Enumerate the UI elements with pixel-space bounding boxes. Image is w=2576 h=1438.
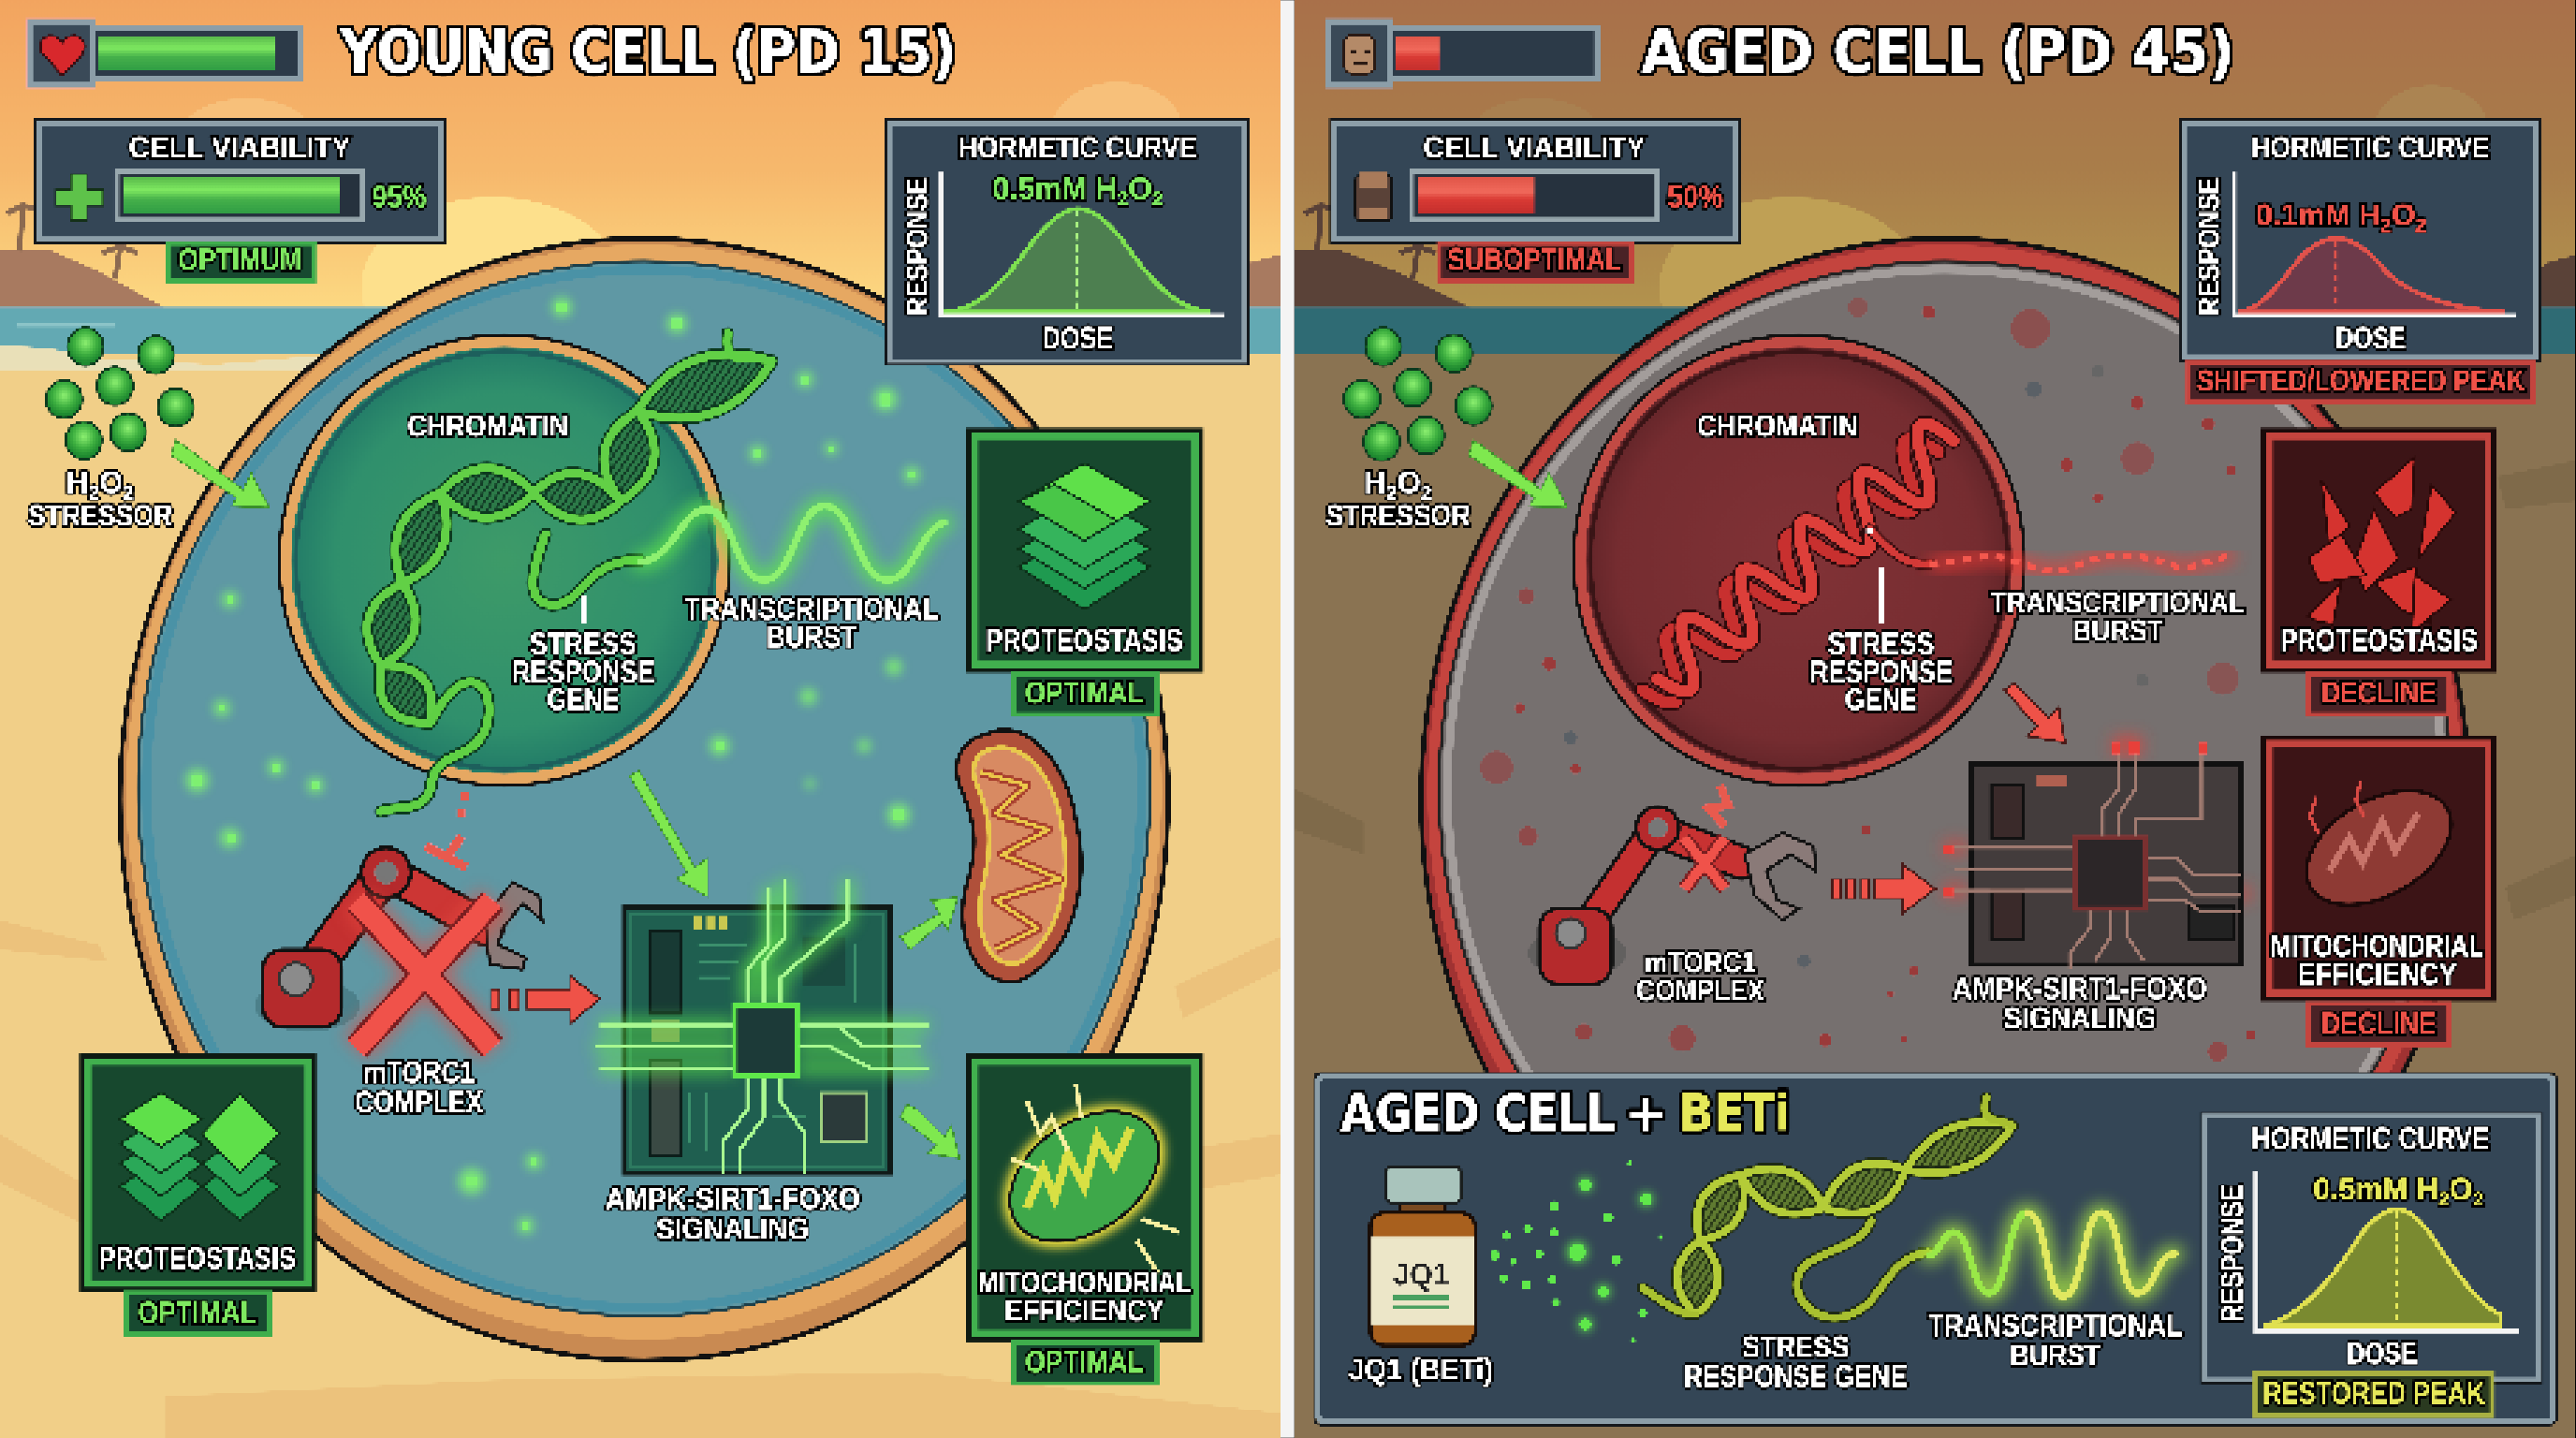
- nucleus: [279, 335, 729, 785]
- tag: optimal (mitochondria): OPTIMAL: [1025, 1344, 1144, 1378]
- chip: AMPK-SIRT1-FOXO signaling: [594, 879, 929, 1175]
- aged nucleus: [1573, 335, 2024, 785]
- tag: optimal (top right): OPTIMAL: [1025, 676, 1144, 710]
- label: stress response gene: [1809, 566, 1953, 716]
- dose label: 0.1mM H2O2: 0.1mM H: [2256, 198, 2380, 231]
- glowing sparkles: [185, 298, 920, 1234]
- label: mitochondrial efficiency: [977, 1266, 1191, 1328]
- arrow: stressor into aged cell: [1469, 440, 1567, 507]
- icon: H2O2 molecules: [1344, 328, 1492, 461]
- arrow: stressor into cell: [171, 440, 270, 507]
- value: 95 percent: 95%: [373, 180, 426, 213]
- label: H2O2 stressor: [1325, 466, 1471, 533]
- value: 50 percent: 50%: [1667, 180, 1723, 213]
- icon: broken protein shards: [2308, 457, 2456, 633]
- icon: damaged mitochondrion: [2287, 767, 2471, 929]
- arrow: signal to chip: [629, 770, 708, 897]
- card: proteostasis (top right): [970, 431, 1201, 670]
- label: AMPK-SIRT1-FOXO signaling: AMPK-SIRT1-FOXO: [606, 1182, 860, 1216]
- dose label: 0.5mM H2O2: O: [1128, 171, 1152, 205]
- axis label: response: RESPONSE: [2192, 178, 2226, 315]
- dusk beach background: [1295, 0, 2576, 1438]
- label: mitochondrial efficiency: MITOCHONDRIAL: [977, 1266, 1191, 1299]
- heading: hormetic curve: HORMETIC CURVE: [959, 130, 1197, 164]
- chart: lowered hormetic curve: [2234, 172, 2517, 315]
- label: H2O2 stressor: O: [1398, 466, 1421, 500]
- label: H2O2 stressor: H: [66, 466, 88, 500]
- chromatin DNA helix: [367, 333, 772, 812]
- card: mitochondrial efficiency: [970, 1056, 1201, 1339]
- label: transcriptional burst: TRANSCRIPTIONAL: [1928, 1309, 2183, 1343]
- dose label: 0.5mM H2O2: 0.5mM H: [2313, 1172, 2438, 1206]
- panel: hormetic curve: [2180, 120, 2539, 361]
- axis label: response: RESPONSE: [2216, 1184, 2249, 1323]
- tag: optimal (left): OPTIMAL: [138, 1296, 256, 1329]
- tag: shifted lowered peak: SHIFTED/LOWERED PEAK: [2197, 364, 2525, 398]
- icon: JQ1 bottle: [1370, 1167, 1475, 1345]
- label: stress response gene: [512, 594, 654, 716]
- label: H2O2 stressor: 2: [123, 483, 134, 505]
- dose label: 0.5mM H2O2: 2: [2473, 1189, 2484, 1211]
- label: signaling: AMPK-SIRT1-FOXO: [1953, 972, 2207, 1005]
- axis label: response: RESPONSE: [900, 178, 934, 315]
- label: H2O2 stressor: [28, 466, 172, 533]
- arrow: dashed red to chip: [1832, 864, 1936, 914]
- dose label: 0.5mM H2O2: O: [2450, 1172, 2473, 1206]
- label: stress response gene: RESPONSE: [1809, 654, 1953, 688]
- tag: decline (mitochondria): DECLINE: [2321, 1006, 2437, 1040]
- label: H2O2 stressor: 2: [1386, 483, 1398, 505]
- label: mTORC1 complex: [355, 1056, 483, 1119]
- label: proteostasis: PROTEOSTASIS: [2280, 624, 2478, 657]
- label: AMPK-SIRT1-FOXO signaling: [606, 1182, 860, 1245]
- label: mTORC1 complex: COMPLEX: [355, 1085, 483, 1119]
- arrow: chip to mitochondrial efficiency: [900, 1104, 959, 1158]
- divider between panels: [1280, 0, 1295, 1438]
- viability bar: [1412, 171, 1658, 220]
- title: young cell: YOUNG CELL (PD 15): [339, 17, 956, 86]
- label: H2O2 stressor: O: [99, 466, 123, 500]
- aged cell membrane and cytoplasm: [1421, 238, 2469, 1360]
- label: stress response gene: RESPONSE GENE: [1684, 1359, 1908, 1393]
- axis label: dose: DOSE: [2347, 1337, 2418, 1371]
- label: mTORC1 complex: [1636, 946, 1764, 1007]
- axis label: dose: DOSE: [2335, 321, 2406, 355]
- viability bar: [117, 171, 363, 220]
- mTORC1 robot arm overactive: [1528, 785, 1815, 984]
- label: chromatin: CHROMATIN: [1697, 409, 1858, 443]
- title: aged cell + BETi: [1340, 1083, 1791, 1142]
- label: mitochondrial efficiency: MITOCHONDRIAL: [2271, 929, 2484, 962]
- dose label: 0.1mM H2O2: 2: [2380, 214, 2392, 236]
- label: transcriptional burst: TRANSCRIPTIONAL: [684, 593, 939, 626]
- dose label: 0.5mM H2O2: 0.5mM H: [992, 171, 1118, 205]
- axis label: dose: DOSE: [1043, 321, 1113, 355]
- transcriptional burst wave: [640, 506, 944, 580]
- label: H2O2 stressor: STRESSOR: [28, 499, 172, 533]
- label: stress response gene: STRESS: [530, 627, 637, 661]
- label: stress response gene: GENE: [1845, 682, 1917, 716]
- icon: heart: [40, 36, 84, 76]
- tag: restored peak: RESTORED PEAK: [2263, 1376, 2485, 1410]
- label: H2O2 stressor: STRESSOR: [1325, 499, 1471, 533]
- title: aged cell + BETi: BETi: [1679, 1083, 1791, 1142]
- dose label: 0.5mM H2O2: 2: [1118, 188, 1128, 210]
- icon: aged face: [1355, 172, 1392, 220]
- label: proteostasis: PROTEOSTASIS: [98, 1241, 296, 1275]
- label: mitochondrial efficiency: EFFICIENCY: [2298, 957, 2457, 990]
- title: aged cell + BETi: AGED CELL: [1340, 1083, 1615, 1142]
- beach background: [0, 0, 1280, 1438]
- panel: restored hormetic curve: [2202, 1112, 2541, 1384]
- restored transcriptional burst: [1928, 1212, 2175, 1297]
- tag: suboptimal: SUBOPTIMAL: [1447, 242, 1621, 276]
- heading: hormetic curve: HORMETIC CURVE: [2251, 130, 2490, 164]
- label: transcriptional burst: BURST: [2010, 1338, 2100, 1372]
- icon: double stacked proteins: [120, 1093, 279, 1221]
- card: proteostasis (left): [82, 1056, 314, 1290]
- health bar: aged: [1327, 22, 1597, 85]
- icon: H2O2 molecules: [46, 328, 194, 460]
- arrow: nucleus to chip: [2004, 683, 2065, 742]
- condensed red chromatin: [1643, 423, 1954, 703]
- label: H2O2 stressor: H: [1365, 466, 1386, 500]
- label: mTORC1 complex: mTORC1: [1645, 946, 1756, 979]
- label: mitochondrial efficiency: [2271, 929, 2484, 990]
- heading: cell viability: CELL VIABILITY: [129, 130, 351, 164]
- mTORC1 robot arm inhibited: [255, 792, 542, 1049]
- panel: young cell: [0, 0, 1280, 1438]
- chart: restored curve: [2256, 1171, 2519, 1331]
- label: mTORC1 complex: mTORC1: [363, 1056, 475, 1090]
- label: stress response gene: STRESS: [1742, 1330, 1849, 1364]
- tag: optimum: OPTIMUM: [178, 242, 301, 276]
- label: transcriptional burst: BURST: [2072, 613, 2163, 647]
- heading: hormetic curve: HORMETIC CURVE: [2251, 1122, 2490, 1155]
- icon: green plus: [56, 174, 104, 220]
- label: transcriptional burst: [1990, 586, 2245, 647]
- icon: mitochondrion: [957, 730, 1081, 982]
- icon: stacked folded protein: [1018, 463, 1150, 609]
- card: mitochondrial efficiency decline: [2264, 738, 2494, 999]
- title: aged cell + BETi: +: [1625, 1083, 1667, 1142]
- panel: cell viability: [1331, 120, 1740, 243]
- dose label: 0.1mM H2O2: 2: [2415, 214, 2426, 236]
- title: aged cell: AGED CELL (PD 45): [1641, 17, 2234, 86]
- label: transcriptional burst: [1928, 1309, 2183, 1372]
- dose label: 0.1mM H2O2: O: [2392, 198, 2415, 231]
- chip: degraded signaling: [1943, 736, 2250, 969]
- panel: cell viability: [36, 120, 445, 243]
- tag: decline (proteostasis): DECLINE: [2321, 676, 2437, 710]
- weak transcriptional burst: [1930, 555, 2234, 570]
- label: signaling: SIGNALING: [2003, 1002, 2157, 1035]
- label: chromatin: CHROMATIN: [407, 409, 568, 443]
- restored DNA helix: [1643, 1097, 2012, 1317]
- label: proteostasis: PROTEOSTASIS: [986, 624, 1183, 657]
- label: JQ1: JQ1 (BETi): [1349, 1353, 1493, 1387]
- label: stress response gene: STRESS: [1828, 627, 1935, 661]
- heading: cell viability: CELL VIABILITY: [1424, 130, 1646, 164]
- label: stress response gene: RESPONSE: [512, 654, 654, 688]
- label: transcriptional burst: BURST: [767, 620, 856, 653]
- label: H2O2 stressor: 2: [88, 483, 99, 505]
- dose label: 0.5mM H2O2: 2: [1152, 188, 1163, 210]
- label: transcriptional burst: [684, 593, 939, 653]
- label: signaling: [1953, 972, 2207, 1035]
- label: stress response gene: [1684, 1330, 1908, 1393]
- arrow: chip to mitochondrion: [900, 897, 958, 949]
- cell membrane and cytoplasm: [120, 238, 1168, 1360]
- panel: hormetic curve: [886, 120, 1249, 365]
- label: mitochondrial efficiency: EFFICIENCY: [1004, 1294, 1164, 1328]
- icon: healthy mitochondrion: [976, 1076, 1192, 1277]
- panel: aged cell plus BETi: [1314, 1073, 2556, 1425]
- chart: hormetic curve: [942, 172, 1224, 315]
- health bar: young: [30, 22, 300, 85]
- arrow: dashed red to chip: [491, 976, 600, 1023]
- label: mTORC1 complex: COMPLEX: [1636, 974, 1764, 1007]
- card: proteostasis decline: [2264, 431, 2494, 670]
- panel: aged cell: [1295, 0, 2576, 1438]
- bottle label text: JQ1: [1393, 1257, 1449, 1292]
- label: stress response gene: GENE: [547, 682, 620, 716]
- dose label: 0.5mM H2O2: 2: [2438, 1189, 2450, 1211]
- icon: tired face: [1344, 35, 1375, 74]
- label: H2O2 stressor: 2: [1421, 483, 1432, 505]
- label: AMPK-SIRT1-FOXO signaling: SIGNALING: [656, 1211, 809, 1245]
- damage spots: [1480, 298, 2256, 1062]
- label: transcriptional burst: TRANSCRIPTIONAL: [1990, 586, 2245, 620]
- green inhibitor particles: [1490, 1161, 1663, 1343]
